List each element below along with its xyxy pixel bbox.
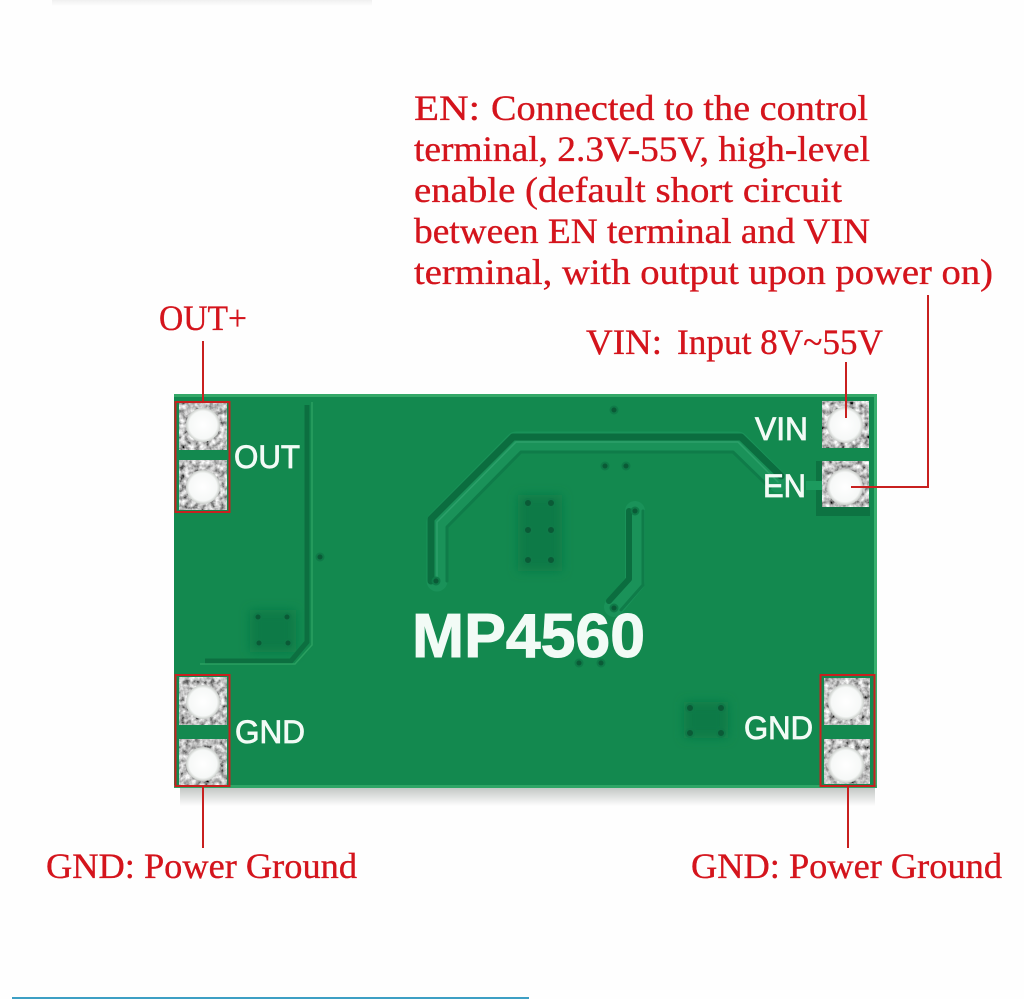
solder pads bbox=[179, 401, 870, 785]
cropped text remnant at top bbox=[52, 0, 372, 6]
silkscreen EN: EN bbox=[763, 468, 806, 504]
label: VIN: VIN: bbox=[586, 322, 662, 362]
copper region outline left bbox=[205, 405, 307, 661]
silkscreen GND left: GND bbox=[235, 714, 305, 750]
label: EN description: EN: bbox=[414, 88, 480, 128]
callout frames and leader lines bbox=[176, 295, 928, 848]
label: EN description: terminal, with output upon power on) bbox=[414, 252, 993, 292]
silkscreen VIN: VIN bbox=[755, 411, 808, 447]
vias bbox=[254, 406, 725, 737]
label: EN description bbox=[414, 88, 993, 292]
label: VIN bbox=[586, 322, 883, 362]
label: EN description: terminal, 2.3V-55V, high-level bbox=[414, 129, 870, 169]
bottom blue rule bbox=[12, 997, 529, 999]
label: GND right: GND: Power Ground bbox=[691, 846, 1002, 886]
EN pad connection bbox=[816, 461, 870, 516]
via halos bbox=[250, 495, 728, 738]
label: GND left: GND: Power Ground bbox=[46, 846, 357, 886]
silkscreen GND right: GND bbox=[744, 710, 813, 746]
label: EN description: Connected to the control bbox=[491, 88, 868, 128]
trace 1 bbox=[431, 437, 781, 581]
label: EN description: between EN terminal and VIN bbox=[414, 211, 870, 251]
label: VIN: Input 8V~55V bbox=[677, 322, 883, 362]
label: OUT+: OUT+ bbox=[159, 298, 247, 338]
trace 2 bbox=[609, 511, 643, 610]
silkscreen MP4560: MP4560 bbox=[412, 602, 645, 671]
circuit board bbox=[174, 394, 877, 788]
label: EN description: enable (default short circuit bbox=[414, 170, 842, 210]
board shadow bbox=[180, 788, 875, 806]
silkscreen OUT: OUT bbox=[234, 439, 300, 475]
